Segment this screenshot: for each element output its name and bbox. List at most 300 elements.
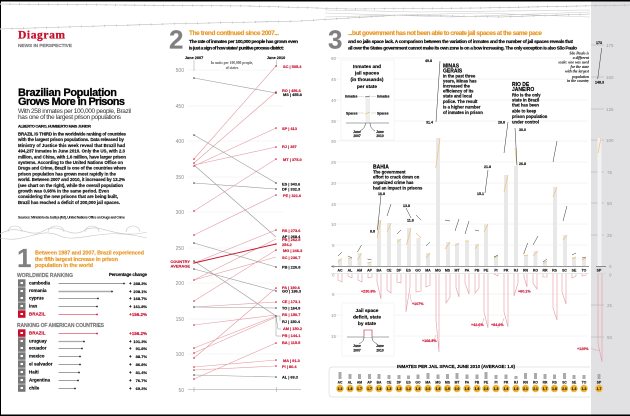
row: Uruguay: 101.3% [133,339,147,344]
row: Chile: + [129,386,132,391]
bar chart: inmates and jail spaces: 15.1 [477,192,484,196]
state labels: DF [397,268,402,272]
annotation: Rio de Janeiro: able to keep [512,108,537,114]
bar chart: inmates and jail spaces: 8.8 [370,230,375,234]
panel: inmates per jail space: 1.6 [416,387,420,391]
row: Iran: + [129,304,132,309]
row: Brazil: +156.2% [129,312,147,317]
slope chart: inmates per 100,000 by state: June 2007 [185,56,203,60]
bar chart: inmates and jail spaces: 40 [331,98,337,103]
row: Romania: 208.1% [133,289,147,294]
row: Haiti [18,368,147,376]
slope chart: inmates per 100,000 by state: 50 [178,388,184,394]
callout: legend inmates and jail spaces [341,60,394,140]
body text: growth was 0.98% in the same period. Even [18,188,109,194]
row: Brazil [18,310,147,318]
annotation: Minas Gerais: state and local [443,94,472,98]
row: Brazil [18,329,147,337]
annotation: Minas Gerais: increased the [443,84,471,88]
slope chart: inmates per 100,000 by state: 450 [176,104,184,110]
annotation: Minas Gerais: is a higher number [443,104,481,110]
annotation: Bahia [373,164,423,190]
bar chart: inmates and jail spaces: 5 [332,292,335,297]
slope chart: inmates per 100,000 by state: 150 [176,317,184,323]
row: Mexico: mexico [29,354,45,358]
body text: world. Between 2007 and 2010, it increased by 13.2% [17,177,125,182]
row: Romania: romania [29,288,47,293]
slope chart: inmates per 100,000 by state: RO | 456.6 [282,88,302,93]
annotation: Minas Gerais: of inmates in prison [443,110,483,115]
bar chart: inmates and jail spaces: 100 [606,138,614,143]
body text: (see chart on the right), while the overall population [18,183,123,188]
row: Cyprus: 168.7% [133,296,147,301]
slope chart: inmates per 100,000 by state: In units per 100,000 people, [211,61,253,65]
state abbreviations: SC [562,380,567,384]
slope chart: inmates per 100,000 by state: 500 [176,68,184,74]
state abbreviations: SE [572,380,577,384]
ranking of American countries [17,323,147,392]
heading: section 2: is just a sign of how states' punitive process district: [189,46,284,52]
subtitle: has one of the largest prison populations [18,114,122,121]
row: El Salvador: 86.8% [136,362,147,367]
panel: inmates per jail space: 1.3 [572,387,576,391]
row: Argentina: Argentina [29,378,50,382]
row: El Salvador: + [129,362,132,367]
bar chart: inmates and jail spaces: 21.8 [484,165,491,169]
state abbreviations: PA [465,380,470,384]
state abbreviations: PR [504,380,509,384]
slope chart: inmates per 100,000 by state: CE | 173.1 [282,299,301,304]
state labels: SE [572,268,577,272]
slope chart: inmates per 100,000 by state: SC | 505.4 [283,64,302,69]
annotation: Sao Paulo: in the country [567,79,589,83]
slope chart: inmates per 100,000 by state: PB | 144.1 [282,333,301,338]
bar chart: inmates and jail spaces: +168.5% [422,339,437,343]
body text: BRAZIL IS THIRD in the worldwide ranking of countries [18,132,127,136]
title: Brazilian Population [18,87,117,99]
annotation: Sao Paulo: São Paulo is [569,52,590,56]
bar chart: inmates and jail spaces: +129% [577,347,589,351]
bar chart: inmates and jail spaces: 0 [332,264,335,269]
callout: jail space deficit: Jail space [356,308,379,314]
row: Haiti: Haiti [29,370,39,374]
annotation: Minas Gerais: GERAIS [443,68,463,74]
callout: jail space deficit: deficit, state [353,314,381,320]
row: Chile: chile [29,386,40,390]
callout: legend inmates and jail spaces: Inmates [377,94,390,98]
callout: jail space deficit: 2010 [376,348,384,352]
row: Ecuador: + [129,346,132,351]
panel: inmates per jail space: 1.3 [397,387,401,391]
annotation: Sao Paulo: with the largest [565,70,590,74]
slope chart: inmates per 100,000 by state: COUNTRY [170,259,190,264]
row: Argentina [18,376,147,384]
bar chart: inmates and jail spaces: 15 [331,202,337,207]
body text: 494,237 inmates in June 2010. Only the US, with 2.3 [18,149,126,154]
panel: inmates per jail space: 2.3 [338,387,342,391]
row: Chile [18,384,147,392]
slope chart: inmates per 100,000 by state: PE | 321.6 [283,193,302,198]
numeral 3: 3 [328,24,342,54]
callout: jail space deficit [342,303,394,356]
callout: legend inmates and jail spaces: Spaces [377,112,389,116]
state labels: RO [533,268,538,272]
panel: inmates per jail space: 2.0 [426,387,430,391]
state abbreviations: AP [367,380,373,384]
slope chart: inmates per 100,000 by state: AVERAGE [171,264,190,268]
annotation: Sao Paulo [557,52,590,83]
bar chart: inmates and jail spaces: 0 [332,272,335,278]
bar chart: inmates and jail spaces: +230.8% [361,290,376,294]
numeral 1: 1 [17,243,31,273]
row: Cyprus [18,294,147,302]
annotation: Rio de Janeiro [512,82,548,124]
slope chart: inmates per 100,000 by state: RJ | 150.4 [282,319,301,324]
heading: section 2: The trend continued since 2007... [189,30,279,37]
row: Brazil: +156.2% [129,331,147,336]
state labels: BA [376,268,382,272]
state abbreviations: PE [484,380,489,384]
slope chart: inmates per 100,000 by state: SP | 413 [282,126,298,131]
state abbreviations: AL [348,380,352,384]
state abbreviations: TO [582,380,587,384]
annotation: Rio de Janeiro: Rio is the only [512,92,541,98]
slope chart: inmates per 100,000 by state: 254.2 [282,242,293,247]
bar chart: inmates and jail spaces: 30 [331,139,337,144]
bar chart: inmates and jail spaces: 10 [331,222,337,227]
callout: legend inmates and jail spaces: jail spaces [354,70,379,76]
annotation: Minas Gerais [443,64,483,115]
value badges [336,385,603,392]
worldwide ranking: Percentage change [109,272,148,277]
heading: section 1: Between 1987 and 2007, Brazil experienced [35,250,144,256]
bar chart: inmates and jail spaces: 45 [331,77,337,82]
panel: inmates per jail space: 1.7 [543,387,547,391]
annotation: Minas Gerais: MINAS [443,64,460,70]
bar chart: inmates and jail spaces: 16.8 [378,192,385,196]
state labels: RJ [514,268,518,272]
panel: inmates per jail space: 2.0 [562,387,567,391]
annotation: Minas Gerais: police. The result [443,99,478,104]
state abbreviations: RJ [514,380,518,384]
body text: Drugs and Crime, Brazil is one of the countries where [18,166,127,171]
slope chart: inmates per 100,000 by state: MS | 455.8 [283,92,303,97]
callout: legend inmates and jail spaces: Inmates [345,94,358,98]
bar chart: inmates and jail spaces: 5 [332,243,335,248]
state labels: PI [494,268,498,272]
heading: section 3: all over the States government cannot make its own zone is on a bow increasing. The only exception is also São Paulo [348,46,577,52]
subtitle [18,108,132,121]
bar chart: inmates and jail spaces: 28.8 [498,120,505,124]
state labels [337,268,602,272]
row: Cambodia: cambodia [29,280,51,286]
byline: ALBERTO CAIRO, HUMBERTO MAIS JUNIOR [18,124,91,128]
bar chart: inmates and jail spaces: 11.8 [407,218,414,222]
state abbreviations: RR [543,380,548,384]
bar chart: inmates and jail spaces: 35 [331,119,337,124]
state labels: PR [504,268,509,272]
callout: legend inmates and jail spaces: 2010 [376,134,384,138]
row: Haiti: + [129,370,132,375]
heading: section 2 [189,30,298,52]
state labels: ES [406,268,411,272]
bar chart: inmates and jail spaces: 50 [331,56,337,61]
panel: inmates per jail space: 1.7 [597,387,601,391]
bars [338,138,602,266]
row: Cyprus: + [129,296,132,301]
slope chart: inmates per 100,000 by state: GO | 186.3 [282,288,302,294]
row: Romania [18,287,147,295]
state labels: PB [475,268,480,272]
annotation: Bahia: effort to crack down on [373,174,420,180]
body text: Ministry of Justice this week reveal that Brazil had [18,143,125,148]
heading: section 3 [348,30,577,52]
ranking of American countries: RANKING OF AMERICAN COUNTRIES [17,323,105,329]
slope chart: inmates per 100,000 by state: PB | 226.8 [282,264,301,270]
panel: inmates per jail space: 2.3 [484,387,488,391]
panel: inmates per jail space: 1.3 [387,387,391,391]
annotation: Minas Gerais: In the past three [443,74,476,78]
panel: inmates per jail space: 1.6 [475,387,479,391]
callout: jail space deficit: June [376,344,384,348]
bar chart: inmates and jail spaces: 25 [331,160,337,165]
slope chart: inmates per 100,000 by state: TO | 164.9 [282,306,301,310]
state labels: MA [425,268,431,272]
panel: inmates per jail space: 1.7 [367,387,372,391]
panel: inmates per jail space: 1.3 [582,387,586,391]
callout: legend inmates and jail spaces: (in thousands) [350,77,384,83]
bar chart: inmates and jail spaces: 30.0 [519,128,526,132]
bar chart: inmates and jail spaces: 25 [607,233,613,238]
state labels: MG [435,268,441,272]
heading: section 1 [35,250,144,269]
slope chart: inmates per 100,000 by state: RS | 150.7 [282,312,300,317]
state labels: AM [357,268,362,272]
numeral 2: 2 [169,24,183,54]
bar chart: inmates and jail spaces: +60.1% [518,290,531,294]
source note: Sources: Ministério da Justiça (MJ), United Nations Office on Drugs and Crime [18,216,125,220]
row: Cambodia [18,279,147,287]
annotation: Rio de Janeiro: state in Brazil [512,98,539,102]
side panel: Sao Paulo [591,1,630,415]
state abbreviations: MT [455,380,459,384]
state labels: RN [523,268,528,272]
bar chart: inmates and jail spaces: 175 [606,43,614,48]
state abbreviations: SP [597,380,602,384]
state abbreviations [338,380,602,384]
body text: million, and China, with 1.6 million, have larger prison [18,154,126,159]
state abbreviations: RS [552,380,558,384]
logo: Diagram [18,30,73,49]
row: Iran: iran [29,304,38,308]
panel: inmates per jail space: 1.6 [465,387,469,391]
panel: inmates per jail space: 1.6 [504,387,508,391]
state labels: PA [465,268,470,272]
state abbreviations: BA [377,380,382,384]
slope chart: inmates per 100,000 by state: of states [226,66,239,70]
heading: section 1: the fifth largest increase in prison [35,257,119,263]
worldwide ranking [17,272,148,318]
annotation: Rio de Janeiro: prison population [512,114,548,119]
body text: systems. According to the United Nations Office on [18,160,123,165]
bar chart: inmates and jail spaces: 13.8 [403,204,410,208]
slope chart: inmates per 100,000 by state: RJ | 397 [282,144,297,149]
row: Uruguay: uruguay [29,338,47,344]
panel: inmates per jail space: 1.3 [494,387,498,391]
bar chart: inmates and jail spaces: 50 [607,201,613,206]
slope chart: inmates per 100,000 by state: BA | 115.5 [282,340,301,345]
body text: considering the new prisons that are being built, [18,194,118,199]
panel: inmates per jail space [329,364,603,397]
state abbreviations: GO [415,380,421,384]
annotation: Minas Gerais: years, Minas has [443,78,477,84]
state abbreviations: MS [445,380,451,384]
state abbreviations: CE [387,380,392,384]
state abbreviations: RO [533,380,538,384]
row: Argentina: + [129,378,132,383]
slope chart: inmates per 100,000 by state: AP | 268.4 [282,234,301,239]
callout: legend inmates and jail spaces: Inmates and [353,64,381,70]
slope chart: inmates per 100,000 by state: AL | 69.3 [282,374,299,380]
slope chart: inmates per 100,000 by state: RS | 273.6 [282,228,301,233]
bar chart: inmates and jail spaces: +107% [412,302,424,306]
row: Romania: + [129,289,132,294]
callout: legend inmates and jail spaces: June [353,130,361,134]
deficit lines [338,274,602,362]
bar chart: inmates and jail spaces [331,41,614,362]
row: El Salvador: el salvador [29,362,53,366]
state abbreviations: PB [475,380,480,384]
panel: inmates per jail space: 2.0 [455,387,459,391]
row: Cambodia: + [129,281,132,286]
callout: jail space deficit: 2007 [353,348,361,352]
bar chart: inmates and jail spaces: 26.8 [519,162,526,166]
row: El Salvador [18,360,147,368]
state labels: AC [337,268,343,272]
body text: with the largest prison populations. Data released by [17,137,125,142]
callout: legend inmates and jail spaces: per state [357,84,377,90]
state labels: RS [552,268,558,272]
annotation: Bahia: The government [373,170,406,174]
worldwide ranking: WORLDWIDE RANKING [17,273,73,279]
annotation: Rio de Janeiro: RIO DE [512,82,530,88]
body text [17,132,127,205]
slope chart: inmates per 100,000 by state: 100 [176,352,184,358]
row: Mexico: + [129,354,132,359]
state labels: SC [562,268,567,272]
row: Ecuador: ecuador [29,346,47,350]
row: Chile: 69.3% [136,386,147,391]
row: Cambodia: 288.3% [133,281,147,286]
state labels: AL [348,268,353,272]
panel: inmates per jail space: 1.2 [406,387,411,391]
title: Grows More in Prisons [18,96,125,108]
panel: inmates per jail space: 1.8 [348,387,352,391]
row: Uruguay [18,337,147,345]
panel: inmates per jail space: 2.1 [533,387,538,391]
state labels: RR [542,268,548,272]
panel: inmates per jail space: 1.0 [514,387,518,391]
callout: legend inmates and jail spaces: Spaces [346,112,358,116]
slope chart: inmates per 100,000 by state: June 2010 [267,56,285,60]
panel: inmates per jail space: 1.9 [445,387,450,391]
state labels: MS [445,268,451,272]
state labels: CE [387,268,392,272]
slope chart: inmates per 100,000 by state: PA | 190.6 [282,285,301,290]
bar chart: inmates and jail spaces: 125 [606,107,614,112]
heading: section 3: and so jails space lack. A comparison between the variation of inmates and the number of jail spaces reveals that [348,39,573,45]
bar chart: inmates and jail spaces: 50 [607,335,613,340]
panel: inmates per jail space: INMATES PER JAIL SPACE, JUNE 2010 (AVERAGE: 1.6) [397,364,515,369]
spaces lines [338,138,601,264]
annotation: Sao Paulo: scale: one was used [557,60,589,64]
callout: jail space deficit: June [353,344,361,348]
slope chart: inmates per 100,000 by state: 200 [176,281,184,287]
bar chart: inmates and jail spaces: 150 [606,75,614,80]
bar chart: inmates and jail spaces: 10 [331,313,337,318]
slope chart: inmates per 100,000 by state: 400 [176,139,184,145]
row: Iran [18,302,147,310]
panel: inmates per jail space: 1.6 [552,387,557,391]
row: Haiti: 81.4% [136,370,147,375]
slope chart: inmates per 100,000 by state: MT | 375.0 [283,157,302,162]
slope chart: inmates per 100,000 by state [170,56,303,394]
row: Argentina: 76.7% [136,378,147,383]
annotation: Rio de Janeiro: JANEIRO [512,87,534,93]
slope chart: inmates per 100,000 by state: ES | 343.6 [282,182,301,186]
row: Mexico: 88.7% [136,354,147,359]
bar chart: inmates and jail spaces: 49.8 [425,59,432,63]
annotation: Sao Paulo: population [571,75,589,79]
slope chart: inmates per 100,000 by state: 250 [176,246,184,252]
slope chart: inmates per 100,000 by state: 300 [176,210,184,216]
slope chart: inmates per 100,000 by state: PB | 262.5 [282,237,301,242]
state abbreviations: AC [338,380,343,384]
title [18,87,125,108]
state abbreviations: PI [494,380,498,384]
body text: prison population has grown most rapidly in the [18,171,117,176]
row: Cyprus: cyprus [29,296,44,300]
bar chart: inmates and jail spaces: 148.3 [595,80,604,84]
annotation: Bahia: organized crime has [373,180,414,185]
row: Uruguay: + [129,339,132,344]
slope chart: inmates per 100,000 by state: AM | 150.2 [283,326,303,331]
logo: Diagram: NEWS IN PERSPECTIVE [18,43,73,49]
bar chart: inmates and jail spaces: 20 [331,181,337,186]
bar chart: inmates and jail spaces: 0 [609,264,612,269]
slope chart: inmates per 100,000 by state: MG | 246.3 [283,248,303,253]
panel: inmates per jail space: 1.8 [377,387,381,391]
row: Mexico [18,352,147,360]
bar chart: inmates and jail spaces: 31.4 [426,120,433,124]
annotation: Sao Paulo: for the state [570,65,589,69]
annotation: Bahia: BAHIA [373,164,389,170]
row: Brazil: BRAZIL [29,312,46,316]
slope chart: inmates per 100,000 by state: DF | 332.3 [282,186,301,192]
state labels: MT [454,268,460,272]
slope chart: inmates per 100,000 by state: MA | 91.3 [283,358,301,363]
annotation: Sao Paulo: a different [573,56,590,60]
state abbreviations: DF [397,380,401,384]
bar chart: inmates and jail spaces: 15 [331,334,337,339]
bar chart: inmates and jail spaces: 75 [607,170,613,175]
bar chart: inmates and jail spaces: 0 [609,272,612,278]
slope chart: inmates per 100,000 by state: PI | 80.4 [282,364,297,369]
subtitle: With 258 inmates per 100,000 people, Brazil [18,108,132,115]
panel: inmates per jail space: 2.1 [523,387,528,391]
callout: legend inmates and jail spaces: 2007 [353,134,361,138]
row: Ecuador: 91.8% [136,346,147,351]
